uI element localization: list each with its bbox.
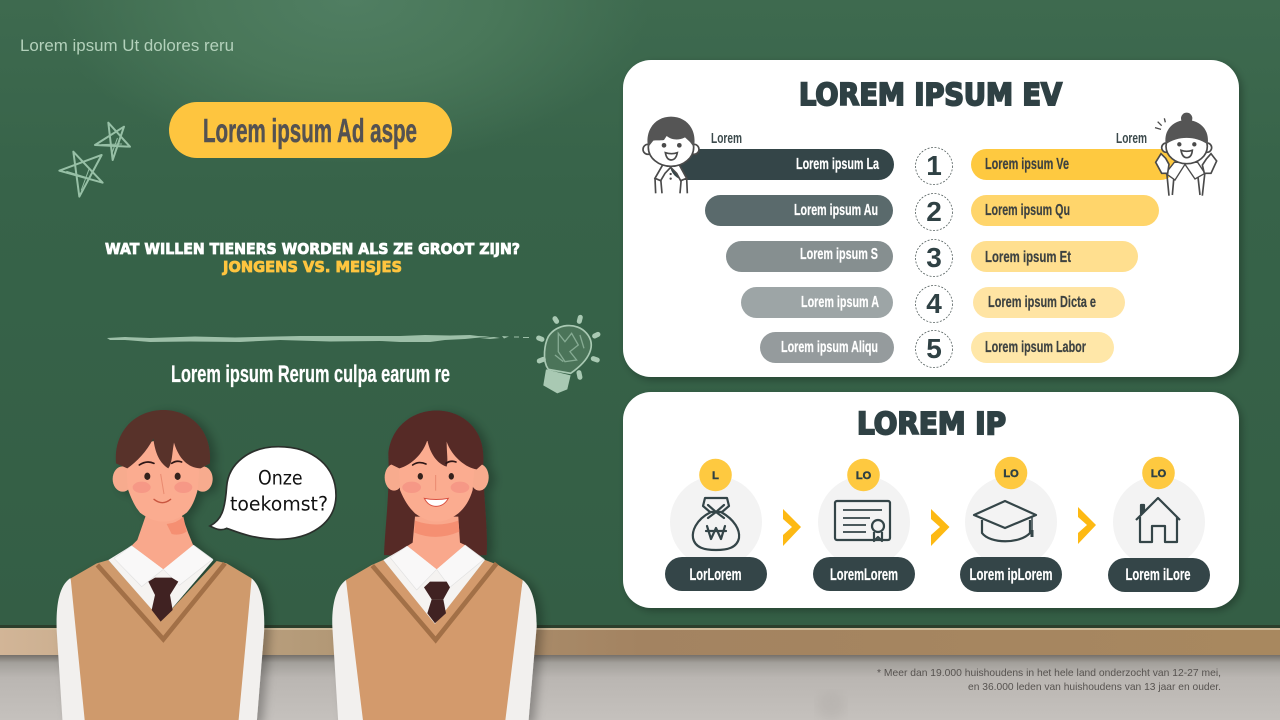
- icon: girl: [1155, 113, 1217, 196]
- icon: money bag: [693, 498, 739, 550]
- girls bars: [971, 149, 1176, 363]
- section caption: Lorem ipsum Rerum culpa earum re: [171, 361, 450, 388]
- step labels: [665, 557, 1210, 592]
- illustration: girl student: [332, 411, 537, 720]
- icon: house: [1136, 498, 1180, 542]
- step badges: LO: [856, 470, 872, 482]
- footnote: en 36.000 leden van huishoudens van 13 jaar en ouder.: [968, 681, 1221, 693]
- panel heading: LOREM IP: [857, 407, 1006, 442]
- step badges: [699, 457, 1175, 491]
- column labels: [711, 130, 1147, 147]
- icon: boy: [643, 117, 699, 193]
- rank numbers: 1: [926, 150, 942, 181]
- footnote: * Meer dan 19.000 huishoudens in het hele land onderzocht van 12-27 mei,: [877, 667, 1221, 679]
- girls bars: Lorem ipsum Labor: [985, 339, 1086, 356]
- step badges: LO: [1151, 468, 1167, 480]
- illustration: boy student: [57, 410, 264, 720]
- step arrows: [783, 507, 1096, 546]
- step labels: Lorem iLore: [1126, 565, 1190, 584]
- rank numbers: 5: [926, 333, 942, 364]
- rank numbers: 2: [926, 196, 942, 227]
- step badges: LO: [1003, 468, 1019, 480]
- girls bars: Lorem ipsum Et: [985, 249, 1071, 266]
- boys bars: [670, 149, 894, 363]
- rank numbers: 3: [926, 242, 942, 273]
- column labels: Lorem: [1116, 130, 1147, 147]
- speech bubble: [210, 447, 336, 539]
- girls bars: Lorem ipsum Ve: [985, 156, 1069, 173]
- icon: chalk stars: [59, 123, 130, 197]
- step badges: L: [712, 470, 719, 482]
- icon: certificate: [835, 501, 890, 541]
- icon: chalk light bulb: [539, 317, 598, 393]
- top-left caption: Lorem ipsum Ut dolores reru: [20, 36, 234, 55]
- yellow title pill: [169, 102, 452, 158]
- girls bars: Lorem ipsum Qu: [985, 202, 1070, 219]
- speech bubble: toekomst?: [230, 493, 328, 516]
- yellow title pill: Lorem ipsum Ad aspe: [203, 112, 417, 149]
- footnote: [877, 667, 1221, 693]
- icon backdrops: [670, 476, 1205, 568]
- step labels: LoremLorem: [830, 565, 898, 584]
- subtitle heading: JONGENS VS. MEISJES: [222, 258, 402, 276]
- boys bars: Lorem ipsum S: [800, 246, 878, 263]
- rank numbers: 4: [926, 288, 942, 319]
- boys bars: Lorem ipsum Aliqu: [781, 339, 878, 356]
- girls bars: Lorem ipsum Dicta e: [988, 294, 1096, 311]
- subtitle heading: [105, 240, 520, 276]
- panel: path to the future: [623, 392, 1239, 608]
- step labels: LorLorem: [690, 565, 742, 584]
- chalk stroke divider: [107, 335, 529, 342]
- panel: ranking comparison: [623, 60, 1239, 377]
- boys bars: Lorem ipsum Au: [794, 202, 878, 219]
- column labels: Lorem: [711, 130, 742, 147]
- icon: graduation cap: [974, 501, 1036, 541]
- subtitle heading: WAT WILLEN TIENERS WORDEN ALS ZE GROOT ZIJN?: [105, 240, 520, 258]
- panel heading: LOREM IPSUM EV: [799, 78, 1063, 113]
- rank numbers: [916, 148, 952, 368]
- step labels: Lorem ipLorem: [970, 565, 1052, 584]
- speech bubble: Onze: [258, 467, 303, 490]
- boys bars: Lorem ipsum La: [796, 156, 879, 173]
- boys bars: Lorem ipsum A: [801, 294, 879, 311]
